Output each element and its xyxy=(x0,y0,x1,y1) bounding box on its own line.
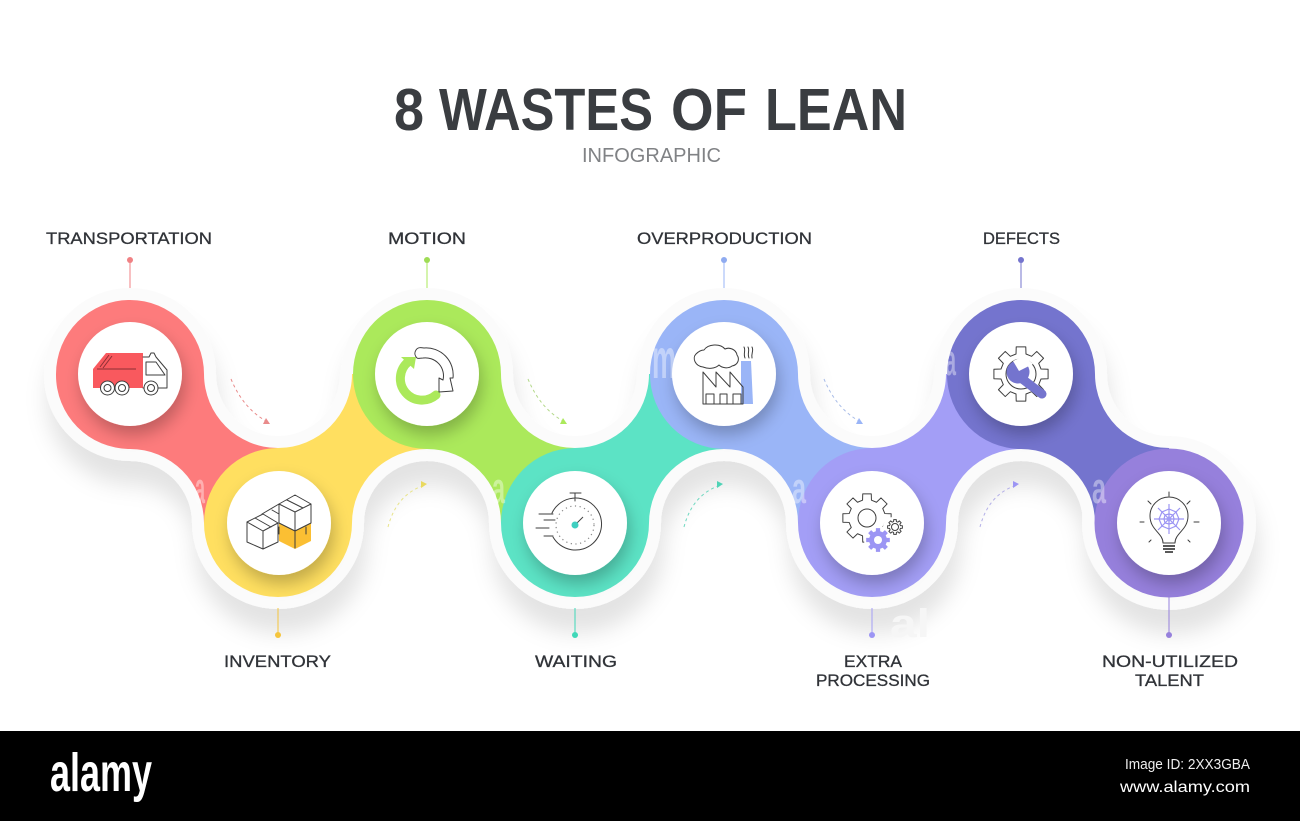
footer bar xyxy=(0,731,1300,821)
segment: motion xyxy=(353,300,575,523)
label: motion: MOTION xyxy=(388,229,466,248)
label: extra processing xyxy=(816,652,930,690)
pin: motion xyxy=(424,257,430,288)
title: WASTES xyxy=(439,77,653,143)
arrow: extra processing to defects xyxy=(980,481,1019,527)
footer logo: alamy xyxy=(50,743,152,803)
watermark on shadow: al xyxy=(890,602,930,646)
label: non-utilized talent: NON-UTILIZED xyxy=(1102,652,1238,671)
icon: truck xyxy=(93,353,167,395)
label: inventory: INVENTORY xyxy=(224,652,331,671)
arrow: motion to waiting xyxy=(528,379,567,424)
stock watermark fragments xyxy=(195,327,1106,513)
arrow: overproduction to extra processing xyxy=(824,379,863,424)
stock watermark fragments: a xyxy=(792,464,806,513)
stock watermark fragments: a xyxy=(195,464,205,513)
stock watermark fragments: a xyxy=(1092,464,1106,513)
halo and soft shadow behind the wave band xyxy=(56,300,1244,598)
arrow: waiting to overproduction xyxy=(684,481,723,527)
pin: extra processing xyxy=(869,608,875,638)
label: waiting: WAITING xyxy=(535,652,617,671)
subtitle: INFOGRAPHIC xyxy=(582,145,721,167)
arrow: transportation to inventory xyxy=(231,379,270,424)
segment: overproduction xyxy=(650,300,872,523)
segment: transportation xyxy=(56,300,278,523)
title: OF xyxy=(671,77,747,143)
stock watermark fragments: m xyxy=(652,327,676,390)
icon: light bulb with spider web xyxy=(1140,492,1199,552)
segment: extra processing xyxy=(798,374,1021,597)
segment: waiting xyxy=(501,374,724,597)
arrow: inventory to motion xyxy=(388,481,427,527)
label: transportation: TRANSPORTATION xyxy=(46,229,212,248)
label: non-utilized talent xyxy=(1102,652,1238,690)
icon: gear and wrench xyxy=(994,347,1048,401)
icon: stacked boxes xyxy=(247,495,311,549)
stock watermark fragments: a xyxy=(492,464,505,513)
pin: transportation xyxy=(127,257,133,288)
pin: inventory xyxy=(275,608,281,638)
footer url: www.alamy.com xyxy=(1119,779,1250,796)
icon: gears xyxy=(843,494,903,554)
label: overproduction: OVERPRODUCTION xyxy=(637,229,812,248)
footer image id: Image ID: 2XX3GBA xyxy=(1125,756,1250,773)
icon: factory xyxy=(694,345,753,404)
icon: cycle arrows xyxy=(400,348,453,400)
label: extra processing: EXTRA xyxy=(844,652,903,671)
icon: stopwatch xyxy=(536,493,602,550)
label: extra processing: PROCESSING xyxy=(816,671,930,690)
pin: defects xyxy=(1018,257,1024,288)
title: 8 xyxy=(394,77,424,143)
segment: defects xyxy=(947,300,1169,523)
segment: non-utilized talent xyxy=(1094,448,1244,598)
pin: waiting xyxy=(572,608,578,638)
pin: non-utilized talent xyxy=(1166,597,1172,638)
title xyxy=(394,77,907,143)
pin: overproduction xyxy=(721,257,727,288)
stock watermark fragments: a xyxy=(945,336,956,385)
label: defects: DEFECTS xyxy=(983,229,1060,248)
title: LEAN xyxy=(765,77,907,143)
segment: inventory xyxy=(204,374,427,597)
label: non-utilized talent: TALENT xyxy=(1135,671,1204,690)
